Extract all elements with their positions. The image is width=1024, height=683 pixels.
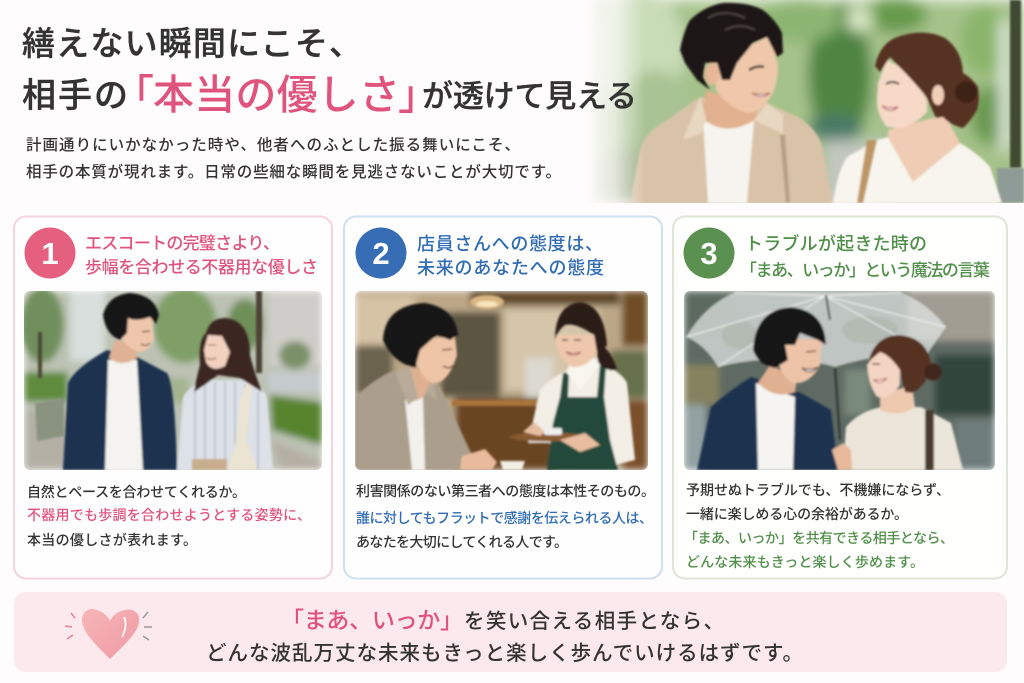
card 3 frame	[673, 216, 1007, 578]
panel: card 3 trouble	[673, 216, 1007, 578]
card 3 text: 予期せぬトラブルでも、不機嫌にならず、	[686, 482, 950, 498]
card 3 number badge	[684, 228, 734, 278]
title line 2: pink emphasis: 本当の優しさ	[153, 72, 400, 118]
card 3 heading: トラブルが起きた時の	[745, 233, 927, 254]
card 1 frame	[14, 216, 332, 578]
card 3 heading	[740, 233, 990, 280]
man	[63, 350, 177, 470]
man	[355, 370, 473, 470]
man	[697, 377, 838, 470]
card 1 heading: 歩幅を合わせる不器用な優しさ	[85, 258, 318, 277]
banner line 1	[281, 607, 724, 633]
card 2 text: 利害関係のない第三者への態度は本性そのもの。	[356, 483, 655, 499]
woman	[528, 363, 635, 467]
intro line 2: 相手の本質が現れます。日常の些細な瞬間を見逃さないことが大切です。	[26, 162, 561, 181]
card 1 heading	[85, 234, 318, 277]
title line 2: tail: が透けて見える	[422, 79, 637, 114]
hero left fade	[585, 0, 645, 203]
card 2 heading	[417, 234, 604, 278]
card 1 text: 不器用でも歩調を合わせようとする姿勢に、	[27, 507, 311, 523]
title line 2: lead: 相手の	[22, 77, 128, 115]
banner line 2: どんな波乱万丈な未来もきっと楽しく歩んでいけるはずです。	[206, 642, 803, 665]
card 2 photo: cafe server	[355, 291, 648, 470]
card 2 text	[356, 483, 655, 550]
card 3 photo: couple under umbrella	[684, 291, 995, 470]
icon: heart with sparkle lines	[65, 609, 152, 659]
card 3 heading: 「まあ、いっか」という魔法の言葉	[740, 261, 990, 280]
panel: card 2 attitude	[344, 216, 662, 578]
card 1 text	[27, 484, 311, 548]
card 1 text: 自然とペースを合わせてくれるか。	[27, 484, 246, 500]
card 3 text: どんな未来もきっと楽しく歩めます。	[686, 554, 924, 570]
banner background	[14, 592, 1007, 672]
card 2 heading: 店員さんへの態度は、	[417, 234, 603, 254]
woman	[843, 407, 963, 470]
card 2 number badge: 2	[372, 236, 390, 271]
intro line 1: 計画通りにいかなかった時や、他者へのふとした振る舞いにこそ、	[26, 136, 520, 154]
banner line 1: 「まあ、いっか」	[281, 607, 463, 633]
banner line 1: を笑い合える相手となら、	[464, 610, 724, 633]
title closing bracket: 」	[398, 72, 439, 118]
card 1 number badge: 1	[41, 236, 59, 271]
card 2 text: あなたを大切にしてくれる人です。	[356, 534, 568, 550]
card 2 frame	[344, 216, 662, 578]
title	[22, 25, 637, 118]
card 1 heading: エスコートの完璧さより、	[85, 234, 280, 253]
hero photo: couple smiling outdoors	[585, 0, 1024, 203]
card 2 number badge	[356, 228, 406, 278]
card 3 text: 「まあ、いっか」を共有できる相手となら、	[684, 530, 954, 546]
panel: card 1 pace	[14, 216, 332, 578]
card 3 text: 一緒に楽しめる心の余裕があるか。	[686, 506, 908, 522]
panel: bottom message banner	[14, 592, 1007, 672]
card 1 number badge	[24, 228, 76, 278]
card 3 text	[684, 482, 954, 570]
card 1 photo: couple walking	[20, 287, 322, 470]
card 2 heading: 未来のあなたへの態度	[417, 258, 604, 278]
title opening bracket: 「	[113, 72, 154, 118]
card 2 text: 誰に対してもフラットで感謝を伝えられる人は、	[356, 510, 653, 526]
card 3 number badge: 3	[700, 236, 718, 271]
woman	[177, 380, 273, 470]
title line 1: 繕えない瞬間にこそ、	[22, 25, 362, 62]
card 1 text: 本当の優しさが表れます。	[27, 532, 197, 548]
intro text	[26, 136, 561, 181]
woman	[833, 137, 1002, 203]
man	[630, 97, 833, 203]
